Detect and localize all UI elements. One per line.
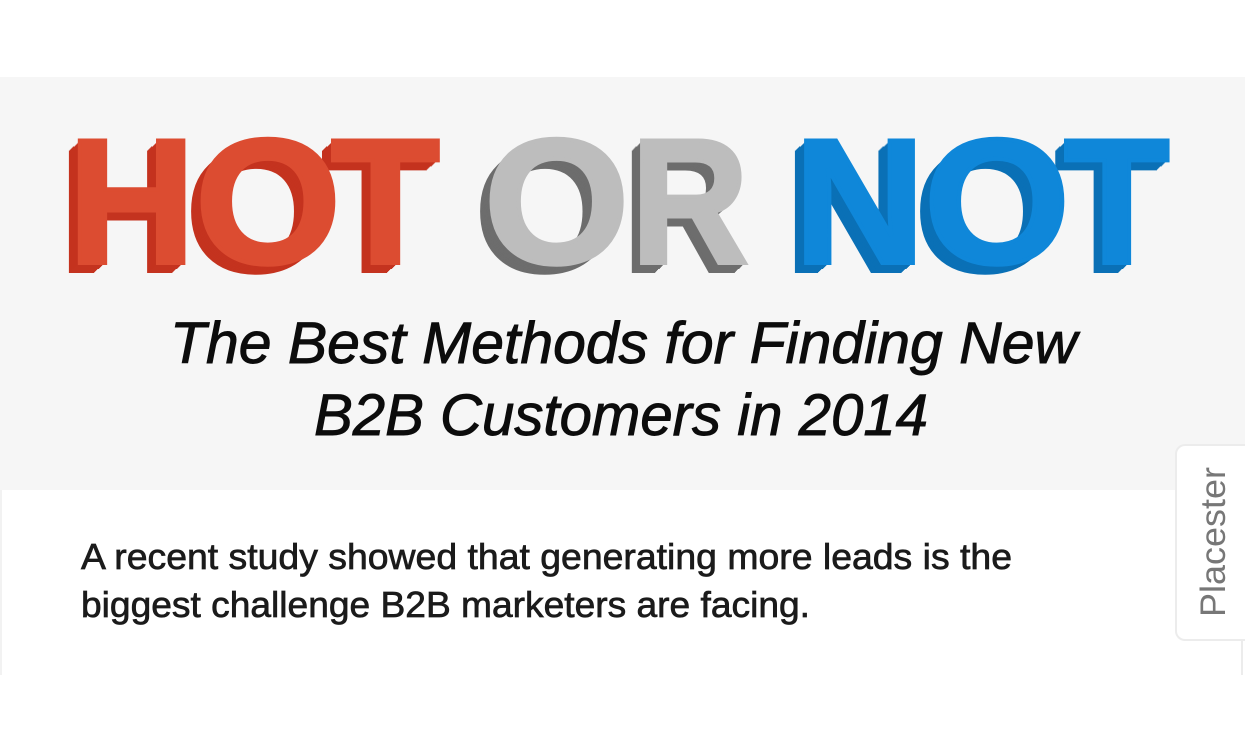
intro text bbox=[80, 536, 1012, 625]
subtitle: B2B Customers in 2014 bbox=[314, 383, 928, 448]
right edge line under the tab bbox=[1241, 641, 1243, 675]
subtitle: The Best Methods for Finding New bbox=[170, 311, 1080, 376]
side tab: Placester bbox=[1175, 444, 1245, 641]
subtitle bbox=[170, 311, 1081, 448]
word: NOT: N bbox=[794, 102, 925, 301]
word: HOT: H bbox=[68, 102, 195, 301]
left edge strip of the content panel bbox=[0, 490, 2, 675]
word: NOT: T bbox=[1064, 102, 1169, 301]
word: OR bbox=[480, 102, 749, 301]
word: NOT bbox=[794, 102, 1170, 301]
word: NOT: O bbox=[924, 102, 1070, 301]
intro text: A recent study showed that generating more leads is the bbox=[81, 536, 1012, 577]
tab label: Placester bbox=[1194, 467, 1233, 617]
word: HOT: O bbox=[195, 102, 341, 301]
word: OR: O bbox=[484, 102, 629, 301]
word: OR: R bbox=[631, 102, 749, 301]
word: HOT: T bbox=[331, 102, 440, 301]
word: HOT bbox=[68, 102, 440, 301]
intro text: biggest challenge B2B marketers are facing. bbox=[81, 584, 810, 625]
title: Hot or Not bbox=[68, 102, 1170, 301]
header background band bbox=[0, 77, 1245, 490]
